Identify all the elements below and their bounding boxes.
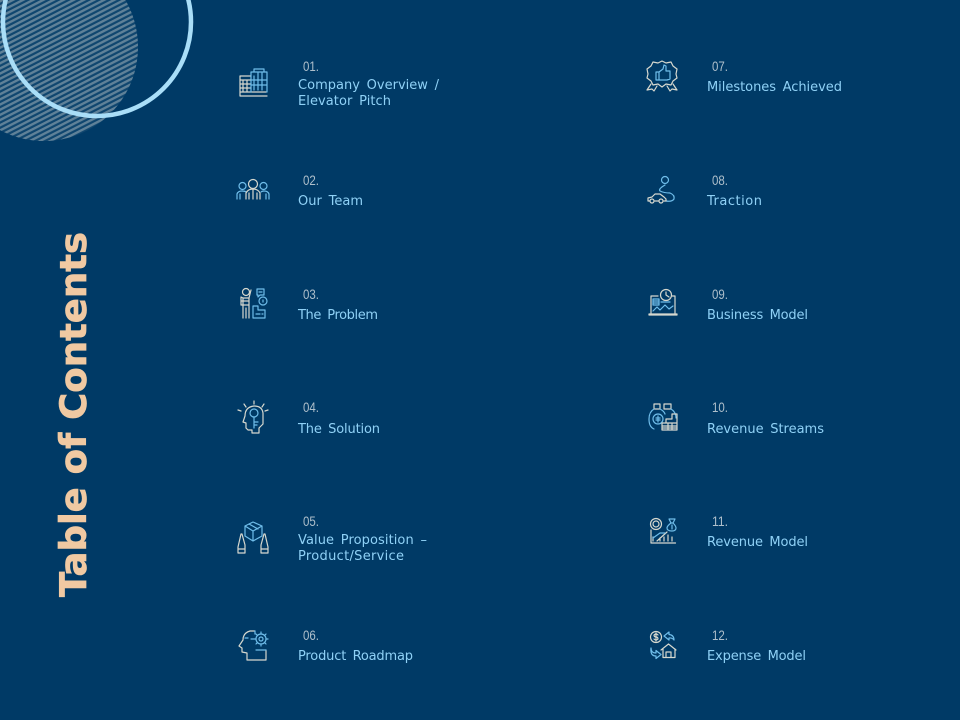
label 08: Traction <box>706 194 762 209</box>
number 02: 02. <box>303 173 319 188</box>
label 01: Company Overview / <box>298 78 440 93</box>
icon: dollar, arrows and house <box>650 632 676 658</box>
number 12: 12. <box>712 628 728 643</box>
label 10: Revenue Streams <box>707 422 824 437</box>
icon: laptop with chart and clock <box>649 290 677 315</box>
label 01 <box>298 78 440 109</box>
title: Table of Contents <box>52 232 95 597</box>
number 04: 04. <box>303 400 319 415</box>
icon: head with gear <box>239 631 268 660</box>
label 05: Value Proposition – <box>298 533 427 548</box>
label 05 <box>298 533 427 564</box>
number 10: 10. <box>712 400 728 415</box>
label 01: Elevator Pitch <box>298 94 391 109</box>
item 09: business model <box>649 287 808 323</box>
label 11: Revenue Model <box>707 535 808 550</box>
number 09: 09. <box>712 287 728 302</box>
icon: award badge with thumbs up <box>647 61 677 91</box>
label 12: Expense Model <box>707 649 806 664</box>
item 08: traction <box>648 173 762 209</box>
item 11: revenue model <box>650 514 808 550</box>
icon: office buildings <box>240 69 267 96</box>
item 04: the solution <box>238 400 380 437</box>
item 05: value proposition <box>238 514 427 564</box>
item 03: the problem <box>241 287 378 323</box>
item 07: milestones achieved <box>647 59 842 95</box>
icon: target, money bag and bar chart <box>650 518 676 543</box>
number 11: 11. <box>712 514 728 529</box>
label 03: The Problem <box>297 308 378 323</box>
icon: hands holding box <box>238 522 268 553</box>
icon: head with key and rays <box>238 401 268 433</box>
ring decoration <box>3 0 191 116</box>
label 05: Product/Service <box>298 549 404 564</box>
icon: money bags and coin stacks <box>649 404 677 430</box>
number 08: 08. <box>712 173 728 188</box>
label 02: Our Team <box>298 194 363 209</box>
item 06: product roadmap <box>239 628 413 664</box>
number 05: 05. <box>303 514 319 529</box>
item 10: revenue streams <box>649 400 824 437</box>
item 01: company overview <box>240 59 440 109</box>
label 06: Product Roadmap <box>298 649 413 664</box>
item 02: our team <box>237 173 363 209</box>
number 01: 01. <box>303 59 319 74</box>
hatched circle decoration <box>0 0 138 141</box>
label 04: The Solution <box>297 422 380 437</box>
label 07: Milestones Achieved <box>707 80 842 95</box>
label 09: Business Model <box>707 308 808 323</box>
number 03: 03. <box>303 287 319 302</box>
item 12: expense model <box>650 628 806 664</box>
number 06: 06. <box>303 628 319 643</box>
icon: person with problem bubbles <box>241 288 267 318</box>
number 07: 07. <box>712 59 728 74</box>
icon: car with route pin <box>648 176 674 203</box>
icon: team of three people <box>237 180 269 199</box>
